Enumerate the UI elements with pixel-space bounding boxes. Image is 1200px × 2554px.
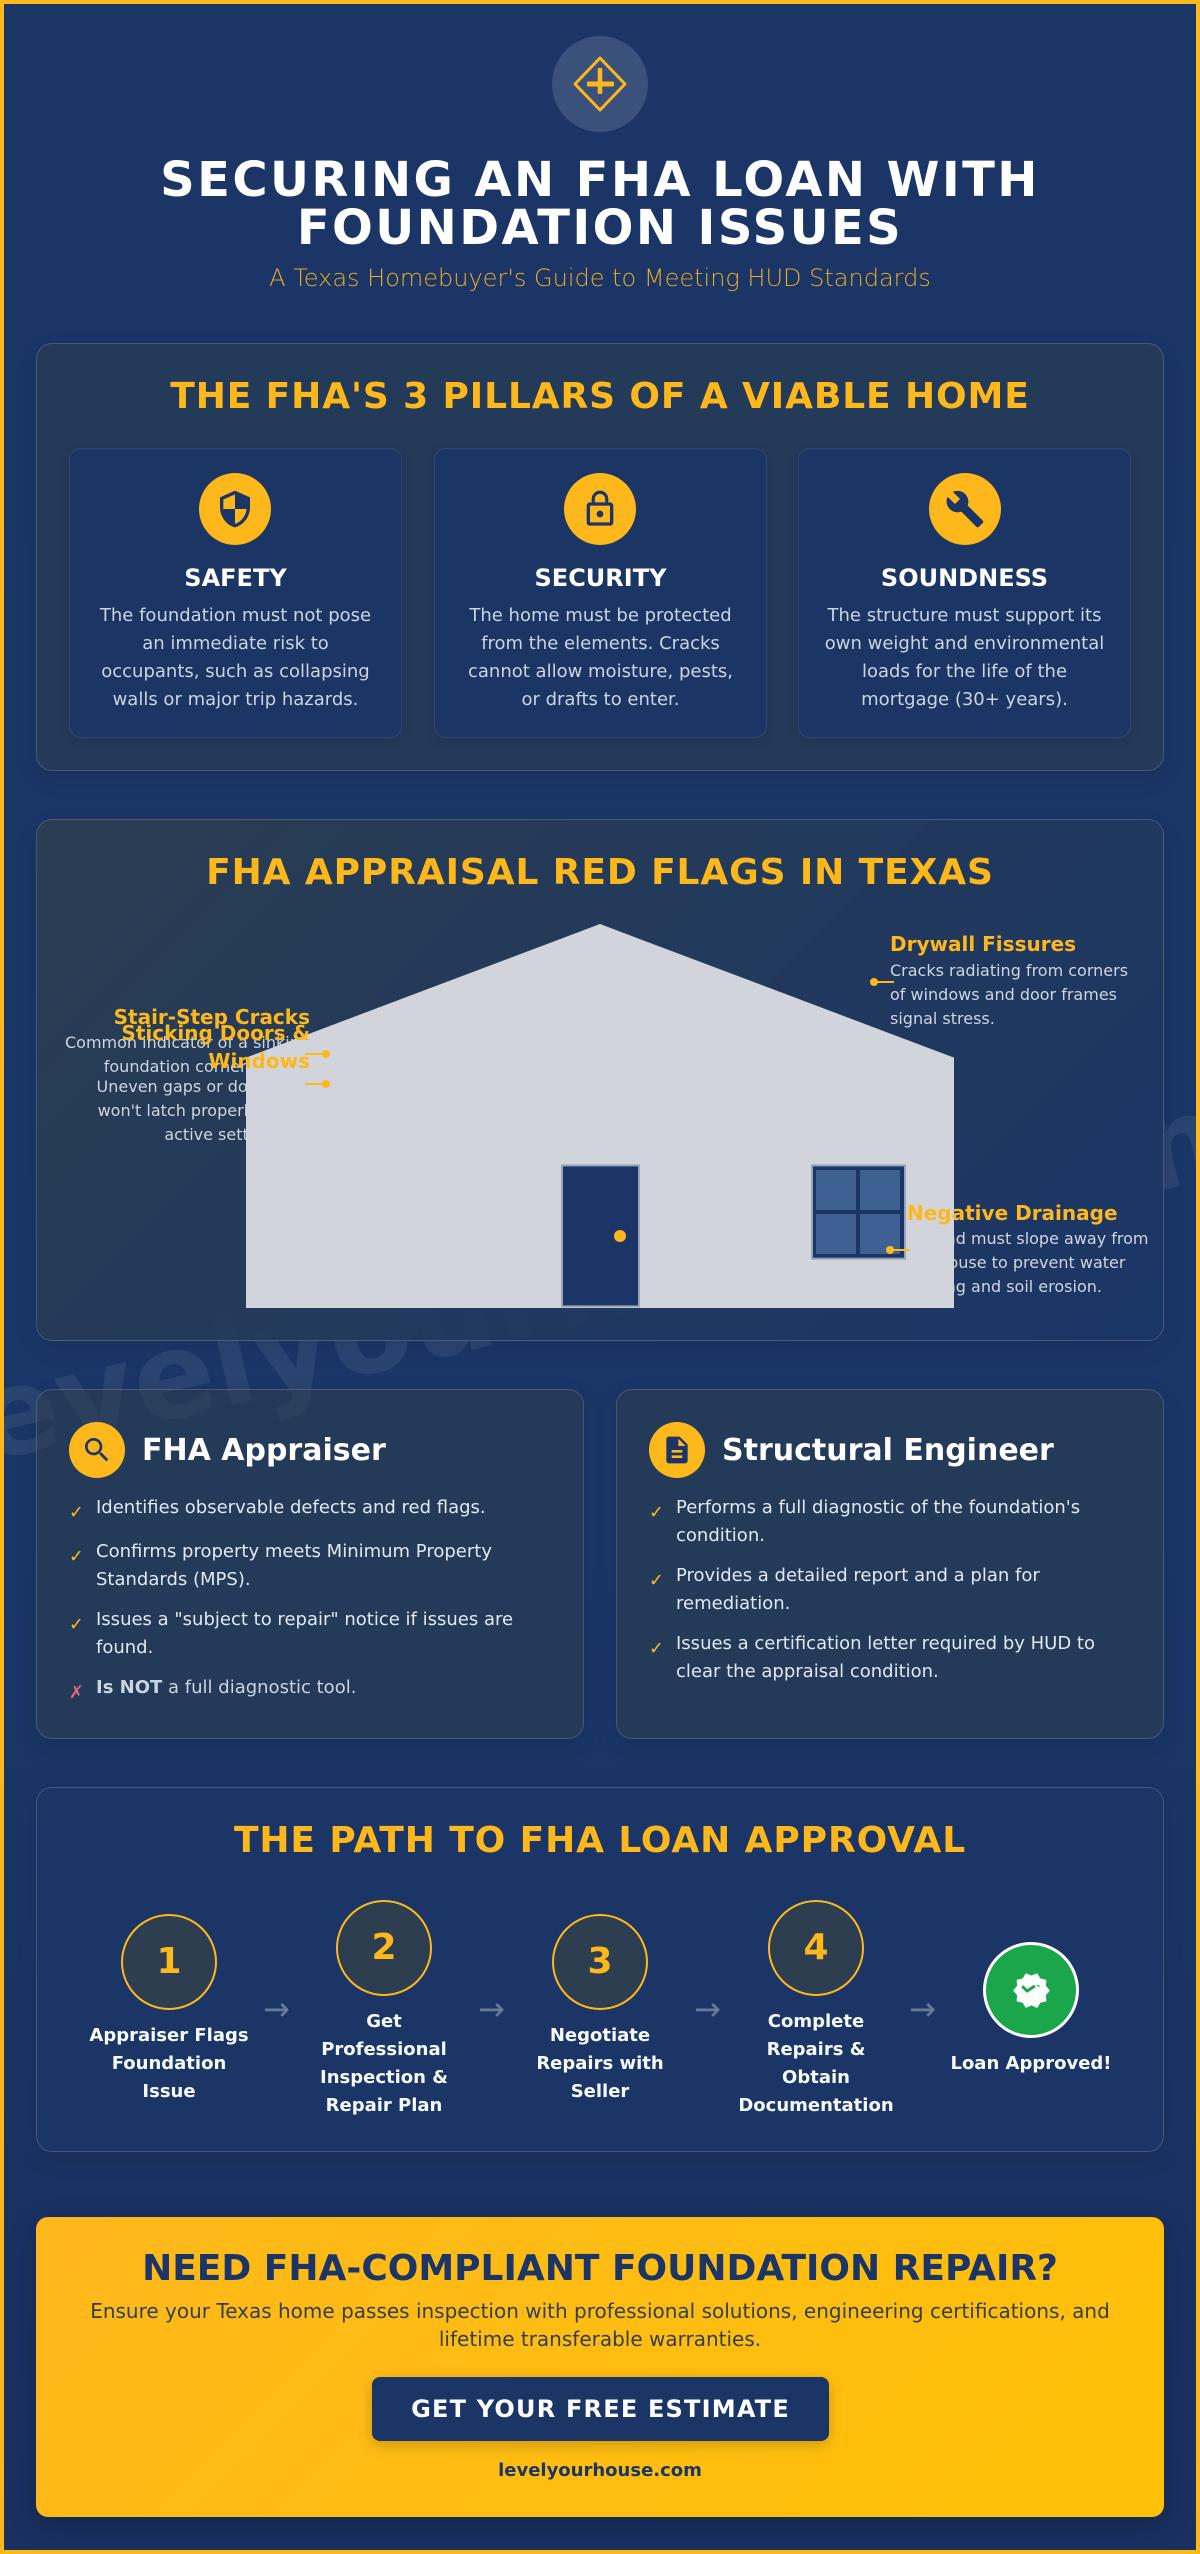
check list: Identifies observable defects and red flags.	[96, 1497, 486, 1518]
step 1 number: 1	[156, 1941, 182, 1982]
step 2 label	[320, 2011, 448, 2116]
panel: red flags	[36, 819, 1164, 1341]
callout: sticking doors: Sticking Doors &	[121, 1021, 310, 1045]
callout: stair-step cracks: foundation corner or wall.	[104, 1057, 310, 1076]
check list: Issues a "subject to repair" notice if issues are	[96, 1609, 513, 1630]
pillar text: an immediate risk to	[142, 633, 329, 654]
pillar text	[468, 605, 733, 710]
pointer: stair-step cracks	[305, 1050, 330, 1058]
step 2 number: 2	[371, 1927, 397, 1968]
panel: call to action	[36, 2217, 1164, 2517]
pillar text	[825, 605, 1104, 710]
callout: negative drainage: Ground must slope away from	[907, 1229, 1148, 1248]
step 4 label: Complete	[768, 2011, 864, 2032]
pillar title: SAFETY	[184, 564, 287, 592]
check list: ✓	[69, 1547, 84, 1567]
check list: found.	[96, 1637, 153, 1658]
callout: sticking doors: won't latch properly signal	[98, 1101, 310, 1120]
pillar text: The structure must support its	[828, 605, 1101, 626]
check list: Provides a detailed report and a plan for	[676, 1565, 1040, 1586]
CTA button	[372, 2377, 829, 2441]
step 4 label	[738, 2011, 894, 2116]
arrow: →	[909, 1990, 936, 2028]
pillar card: safety	[69, 448, 402, 738]
step 4 label: Obtain	[782, 2067, 850, 2088]
pillar text	[100, 605, 371, 710]
arrow: →	[478, 1990, 505, 2028]
check list: remediation.	[676, 1593, 790, 1614]
pillar text: cannot allow moisture, pests,	[468, 661, 733, 682]
pillar text: walls or major trip hazards.	[113, 689, 358, 710]
callout: sticking doors: Windows	[208, 1049, 310, 1073]
step 1 label: Foundation	[112, 2053, 226, 2074]
check list: ✓	[69, 1503, 84, 1523]
CTA text	[90, 2299, 1110, 2351]
step 5 label: Loan Approved!	[950, 2053, 1112, 2074]
pillar text: own weight and environmental	[825, 633, 1104, 654]
step 3 label: Negotiate	[550, 2025, 650, 2046]
pointer: drywall fissures	[870, 978, 894, 986]
check list: condition.	[676, 1525, 765, 1546]
check list: Performs a full diagnostic of the foundation's	[676, 1497, 1080, 1518]
panel: three pillars	[36, 343, 1164, 771]
check list: clear the appraisal condition.	[676, 1661, 939, 1682]
callout: drywall fissures: signal stress.	[890, 1009, 995, 1028]
title	[160, 152, 1040, 256]
website: levelyourhouse.com	[498, 2460, 702, 2481]
CTA heading: NEED FHA-COMPLIANT FOUNDATION REPAIR?	[142, 2248, 1058, 2289]
pillar text: from the elements. Cracks	[481, 633, 720, 654]
title: SECURING AN FHA LOAN WITH	[160, 152, 1040, 208]
step 1 label: Appraiser Flags	[89, 2025, 249, 2046]
heading: three pillars: THE FHA'S 3 PILLARS OF A VIABLE HOME	[170, 376, 1030, 417]
CTA text: lifetime transferable warranties.	[439, 2327, 761, 2351]
check list: Is NOT a full diagnostic tool.	[96, 1677, 356, 1698]
check list: ✓	[649, 1571, 664, 1591]
callout: stair-step cracks: Stair-Step Cracks	[114, 1005, 310, 1029]
pillar text: The home must be protected	[469, 605, 732, 626]
callout: stair-step cracks	[65, 1005, 310, 1076]
callout: negative drainage: the house to prevent water	[907, 1253, 1125, 1272]
icon: wrench	[929, 473, 1001, 545]
step 1 number	[121, 1914, 217, 2010]
pillar text: loads for the life of the	[862, 661, 1067, 682]
role heading: Structural Engineer	[722, 1433, 1054, 1468]
pillar title: SOUNDNESS	[881, 564, 1048, 592]
pillar text: The foundation must not pose	[100, 605, 371, 626]
check list: ✗	[69, 1683, 84, 1703]
check list: Confirms property meets Minimum Property	[96, 1541, 492, 1562]
arrow: →	[694, 1990, 721, 2028]
role heading: FHA Appraiser	[142, 1433, 386, 1468]
step 4 label: Repairs &	[767, 2039, 865, 2060]
step 3 label: Repairs with	[536, 2053, 664, 2074]
callout: sticking doors: Uneven gaps or doors that	[97, 1077, 310, 1096]
house illustration	[246, 924, 954, 1308]
check list	[649, 1497, 1095, 1682]
pointer: negative drainage	[886, 1246, 910, 1254]
callout: drywall fissures: Drywall Fissures	[890, 932, 1076, 956]
callout: drywall fissures: Cracks radiating from corners	[890, 961, 1128, 980]
step 2 label: Inspection &	[320, 2067, 448, 2088]
panel: path to approval	[36, 1787, 1164, 2152]
step 2 label: Professional	[321, 2039, 447, 2060]
CTA text: Ensure your Texas home passes inspection with professional solutions, engineering certifications, and	[90, 2299, 1110, 2323]
icon: magnifier	[69, 1422, 125, 1478]
step 3 label	[536, 2025, 664, 2102]
step 3 number	[552, 1914, 648, 2010]
callout: negative drainage	[907, 1201, 1148, 1296]
callout: drywall fissures: of windows and door frames	[890, 985, 1117, 1004]
pointer: sticking doors	[305, 1080, 330, 1088]
panel: FHA appraiser	[36, 1389, 584, 1739]
pillar text: or drafts to enter.	[521, 689, 680, 710]
step 2 label: Repair Plan	[326, 2095, 442, 2116]
step 4 number: 4	[803, 1927, 829, 1968]
subtitle: A Texas Homebuyer's Guide to Meeting HUD Standards	[269, 264, 931, 292]
step 1 label	[89, 2025, 249, 2102]
check list: Issues a certification letter required by HUD to	[676, 1633, 1095, 1654]
step 2 label: Get	[366, 2011, 402, 2032]
step 2 number	[336, 1900, 432, 1996]
check list: ✓	[649, 1503, 664, 1523]
step 4 number	[768, 1900, 864, 1996]
CTA button: GET YOUR FREE ESTIMATE	[411, 2395, 790, 2423]
pillar text: mortgage (30+ years).	[861, 689, 1068, 710]
step 1 label: Issue	[142, 2081, 196, 2102]
step 3 number: 3	[587, 1941, 613, 1982]
panel: structural engineer	[616, 1389, 1164, 1739]
icon: lock	[564, 473, 636, 545]
check list	[69, 1497, 513, 1703]
callout: negative drainage: Negative Drainage	[907, 1201, 1118, 1225]
callout: sticking doors: active settlement.	[164, 1125, 310, 1144]
callout: stair-step cracks: Common indicator of a sinking	[65, 1033, 310, 1052]
icon: shield	[199, 473, 271, 545]
step 3 label: Seller	[571, 2081, 629, 2102]
callout: drywall fissures	[890, 932, 1128, 1028]
header icon: diamond with plus	[552, 36, 648, 132]
heading: path to approval: THE PATH TO FHA LOAN APPROVAL	[234, 1820, 966, 1861]
step 4 label: Documentation	[738, 2095, 894, 2116]
callout: sticking doors	[97, 1021, 310, 1144]
pillar title: SECURITY	[535, 564, 666, 592]
pillar text: occupants, such as collapsing	[101, 661, 370, 682]
heading: red flags: FHA APPRAISAL RED FLAGS IN TEXAS	[206, 852, 994, 893]
check list: Standards (MPS).	[96, 1569, 251, 1590]
icon: document	[649, 1422, 705, 1478]
pillar card: security	[434, 448, 767, 738]
pillar card: soundness	[798, 448, 1131, 738]
check list: ✓	[69, 1615, 84, 1635]
arrow: →	[263, 1990, 290, 2028]
check list: ✓	[649, 1639, 664, 1659]
step 5: approved badge	[983, 1942, 1079, 2038]
title: FOUNDATION ISSUES	[297, 200, 903, 256]
callout: negative drainage: pooling and soil erosion.	[907, 1277, 1102, 1296]
